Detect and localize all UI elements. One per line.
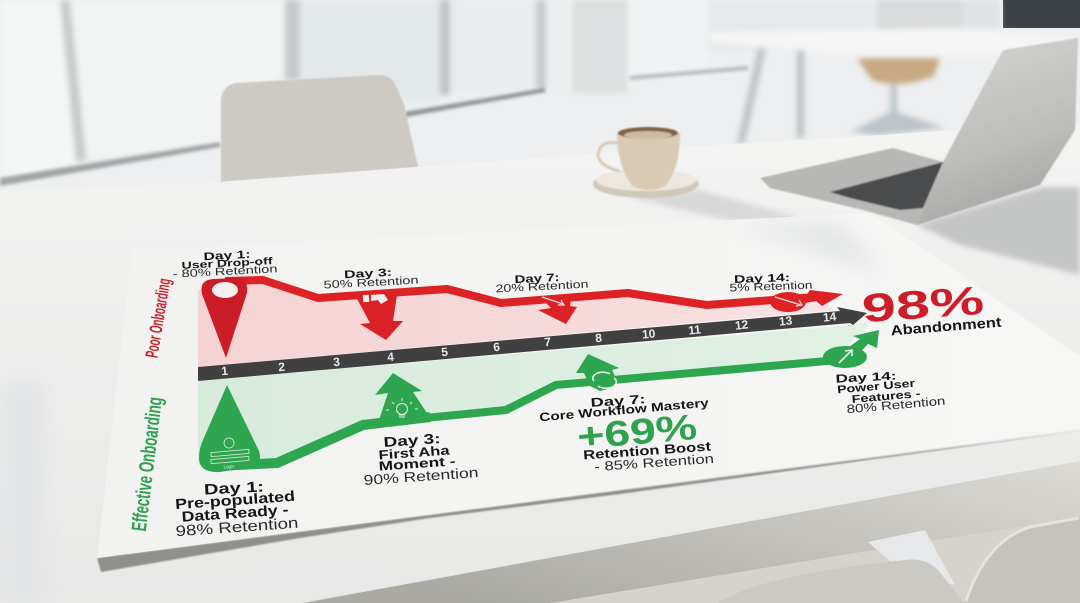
icon: login card [211, 438, 249, 469]
green day 14 label [835, 370, 946, 416]
icon: thumbs down [363, 294, 388, 304]
icon: refresh arrows [593, 372, 616, 388]
green day 7 label with +69% boost: Retention Boost [583, 438, 712, 462]
icon: light bulb [386, 398, 418, 417]
green end arrow [838, 330, 879, 358]
red day 1 label [172, 249, 278, 281]
axis band with arrow [198, 307, 867, 381]
icon: small trend arrow day 14 [775, 297, 802, 306]
red day 14 blob [770, 292, 806, 312]
day numbers: 8 [595, 331, 603, 345]
red day 14 label [729, 272, 813, 294]
green day 1 label: Pre-populated [175, 489, 295, 513]
day numbers: 11 [688, 322, 702, 338]
laptop keyboard [830, 162, 943, 210]
green day 14 label: Day 14: [835, 370, 897, 386]
day numbers: 4 [387, 350, 395, 364]
left table vignette [0, 380, 45, 603]
side label: poor onboarding: Poor Onboarding [142, 277, 174, 359]
laptop base [760, 148, 943, 225]
red day 7 label: Day 7: [514, 272, 560, 286]
red day 3 arrow [355, 295, 403, 340]
green day 1 label [175, 478, 299, 540]
green day 14 label: Features - [851, 388, 921, 406]
red day 1 label: User Drop-off [181, 256, 274, 272]
red end arrowhead [800, 290, 843, 306]
day numbers: 5 [441, 345, 449, 359]
red day 14 label: 5% Retention [729, 280, 813, 294]
green day 7 label with +69% boost: - 85% Retention [594, 451, 714, 474]
green day 3 label: 90% Retention [363, 464, 479, 488]
cast shadow on paper corner [730, 225, 885, 275]
day numbers: 12 [734, 317, 749, 333]
dark corner of the room [1003, 0, 1080, 28]
callout: 98% abandonment [861, 279, 1002, 338]
green day 3 label: First Aha [378, 442, 451, 462]
green day 1 pin [199, 385, 260, 472]
red day 1 pin [201, 278, 247, 358]
red retention line [201, 278, 843, 358]
green day 3 label: Moment - [378, 453, 456, 474]
office background base [0, 0, 1080, 220]
foreground chair left [221, 75, 418, 182]
lower chair seat [718, 559, 964, 603]
green day 14 label: Power User [837, 378, 916, 396]
callout: 98% abandonment: 98% [861, 279, 985, 331]
green day 1 label: Data Ready - [181, 502, 289, 526]
floor [551, 517, 1080, 603]
green area: effective onboarding [198, 321, 870, 465]
green day 7 label with +69% boost: Core Workflow Mastery [539, 396, 710, 424]
red line [225, 280, 815, 305]
coffee surface [618, 127, 678, 139]
cup handle [598, 142, 620, 171]
bright floor patch [868, 530, 955, 585]
blurred desk and chair [710, 28, 1075, 143]
red day 7 label [495, 272, 589, 295]
coffee cup on saucer [593, 127, 800, 228]
red day 7 label: 20% Retention [495, 279, 589, 295]
green day 7 label with +69% boost: Day 7: [590, 392, 646, 410]
window sill lines [0, 66, 748, 186]
day numbers: 7 [544, 335, 552, 349]
laptop [760, 38, 1078, 225]
green line right section [425, 360, 838, 418]
day numbers: 10 [641, 326, 656, 342]
green day 14 blob [823, 346, 867, 368]
table front edge [303, 461, 1080, 603]
day numbers: 3 [333, 355, 341, 369]
red day 7 arrow [538, 297, 577, 324]
red day 3 label: 50% Retention [323, 275, 419, 291]
saucer [593, 170, 699, 198]
day numbers [221, 309, 837, 378]
cup body [617, 133, 680, 190]
green day 7 arrow [576, 354, 619, 391]
chart [128, 249, 1002, 540]
day numbers: 1 [221, 364, 229, 378]
green day 1 label: Day 1: [204, 478, 264, 499]
blurred windows and columns [0, 0, 1000, 180]
green day 3 arrow [375, 373, 427, 423]
laptop screen back [917, 38, 1078, 225]
table top [0, 123, 1080, 603]
red area: poor onboarding [198, 280, 835, 367]
side label: effective onboarding: Effective Onboarding [128, 396, 167, 532]
green day 3 label: Day 3: [383, 430, 441, 450]
green retention line [199, 330, 879, 472]
laptop shadow [917, 187, 1080, 275]
icon: login card: Login [223, 464, 235, 469]
floor and lower chairs [303, 461, 1080, 603]
icon: small trend arrow day 7 [542, 297, 564, 305]
paper sheet [97, 213, 1080, 558]
green day 7 label with +69% boost: +69% [575, 406, 699, 457]
timeline axis [198, 307, 867, 381]
day numbers: 14 [822, 309, 837, 325]
pin hole [212, 282, 238, 298]
red day 3 label [323, 267, 419, 291]
red day 3 label: Day 3: [344, 267, 392, 281]
paper shadow [97, 431, 1080, 572]
green line left section [218, 417, 430, 466]
day numbers: 2 [278, 360, 286, 374]
cup shadow [625, 190, 800, 228]
lower chair rim [966, 518, 1079, 601]
day numbers: 13 [778, 313, 793, 329]
red day 1 label: - 80% Retention [172, 263, 278, 281]
icon: small up arrow [839, 350, 852, 363]
green day 14 label: 80% Retention [846, 394, 946, 416]
green day 3 label [363, 430, 479, 488]
red day 1 label: Day 1: [203, 249, 251, 263]
lower chair back [964, 517, 1080, 603]
day numbers: 6 [493, 340, 501, 354]
callout: 98% abandonment: Abandonment [890, 314, 1002, 338]
green day 1 label: 98% Retention [175, 515, 299, 540]
red day 14 label: Day 14: [734, 272, 790, 286]
green day 7 label with +69% boost [539, 392, 714, 474]
